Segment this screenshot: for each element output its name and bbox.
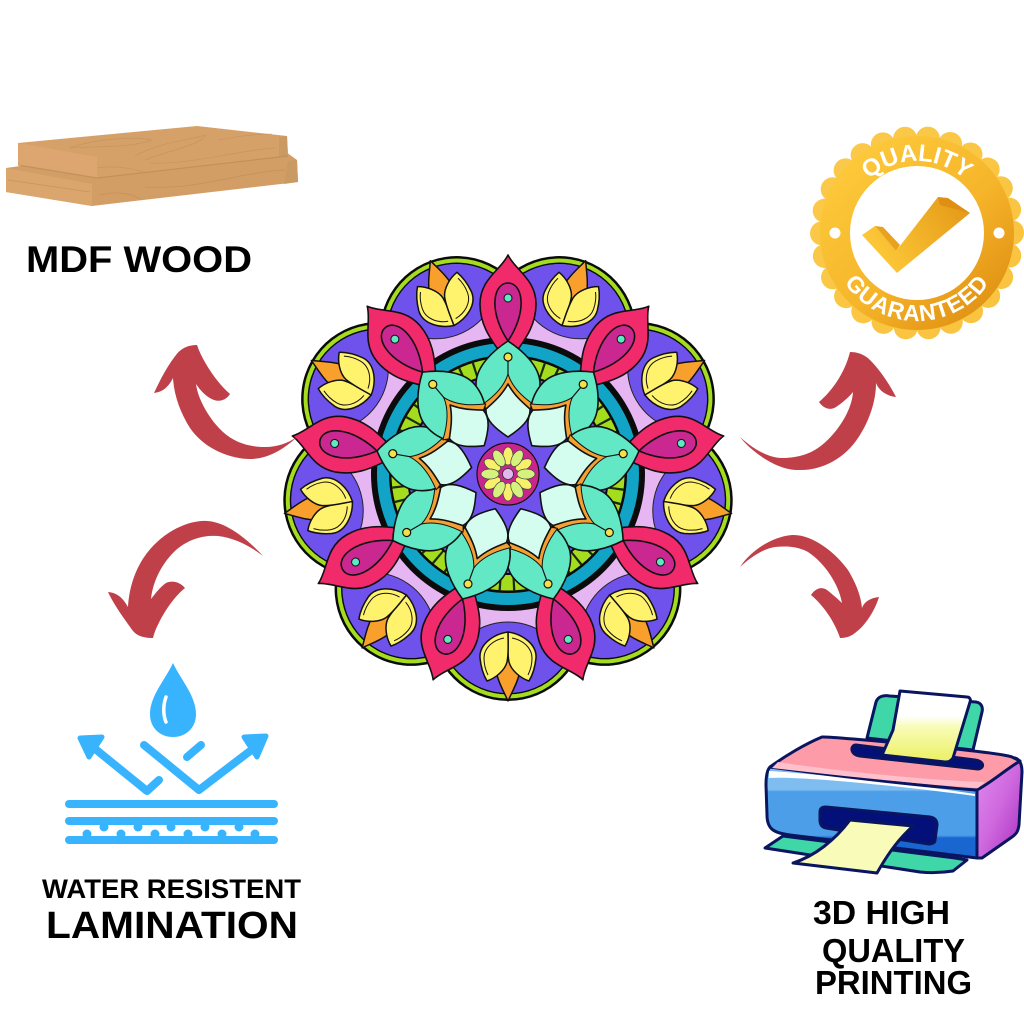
paper out [793,820,913,873]
heading: MDF WOOD: MDF WOOD [26,239,252,280]
badge text: GUARANTEED: GUARANTEED [847,276,986,322]
deflection arrows [94,745,254,791]
label: 3D high quality printing: 3D HIGH [813,894,950,931]
teal leaves with pale kites [371,341,645,610]
water drop [150,663,196,737]
central mandala illustration [283,254,733,702]
icon: check mark [862,197,970,273]
arrow: to lamination [108,521,263,638]
label: water resistent lamination [42,874,302,947]
paper in [882,691,970,762]
arrow: to printing [740,535,879,638]
output slot [820,807,937,844]
label: water resistent lamination: WATER RESISTENT [42,874,302,904]
arrow: to quality badge [740,352,896,470]
rear tray [867,696,982,750]
icon: wood planks [6,126,298,206]
tulips [280,251,736,701]
arrow: to MDF wood [154,345,297,459]
icon: quality guaranteed badge [810,126,1024,340]
center flower [477,443,539,505]
bottom tray [765,836,967,873]
printer front [766,767,977,858]
label: 3D high quality printing: QUALITY [822,932,965,969]
top slot [852,745,983,769]
label: 3D high quality printing [813,894,972,1001]
label: water resistent lamination: LAMINATION [46,905,298,947]
label: 3D high quality printing: PRINTING [815,964,972,1001]
icon: water-resistant lamination [69,663,274,840]
printer side [977,758,1022,858]
badge text: QUALITY: QUALITY [862,144,975,176]
crimson petals [287,255,729,689]
icon: printer [765,691,1022,873]
lower plank [6,152,298,206]
upper plank [18,126,288,178]
layers [69,804,274,840]
printer top [770,737,1020,790]
